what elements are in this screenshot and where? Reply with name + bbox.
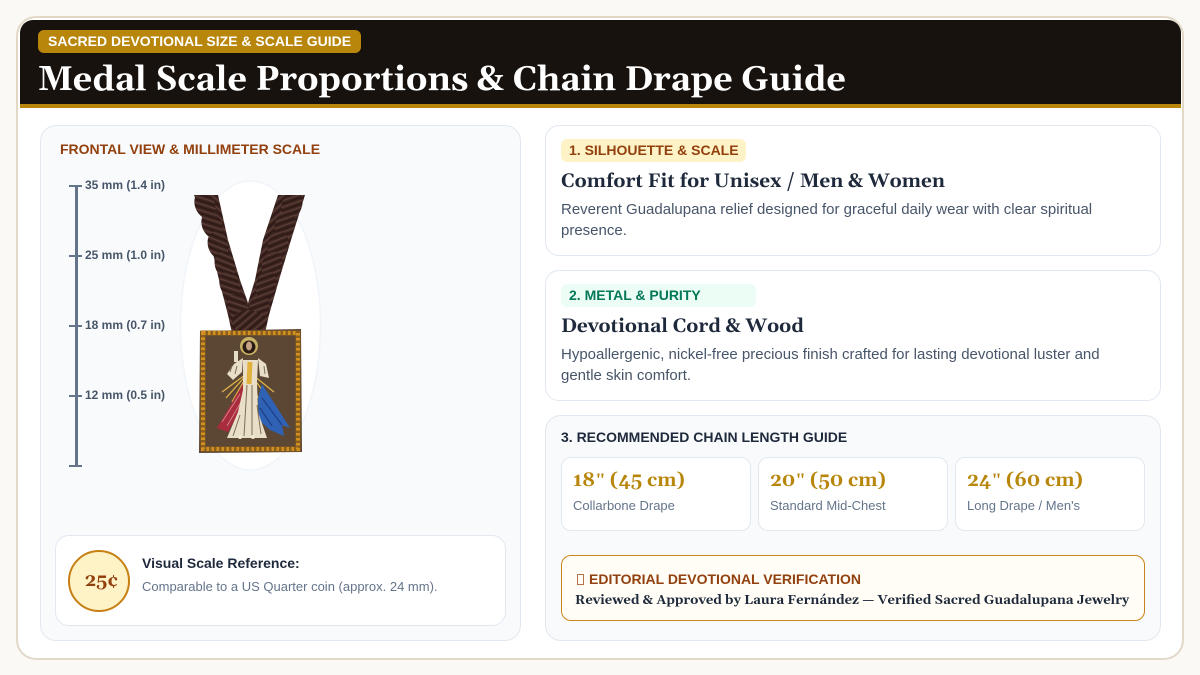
- callout text: Reviewed & Approved by Laura Fernández — Verified Sacred Guadalupana Jewelry: [575, 593, 1129, 609]
- white silhouette ellipse: [180, 181, 320, 470]
- tag: 1. SILHOUETTE & SCALE: [569, 142, 739, 158]
- millimeter ruler: 25 mm (1.0 in): [85, 248, 165, 262]
- medal illustration: [194, 195, 305, 453]
- chain option 24 inch: 24" (60 cm): [967, 468, 1083, 492]
- editorial verification callout: [561, 555, 1145, 621]
- rays: red: [217, 382, 244, 432]
- card heading: Comfort Fit for Unisex / Men & Women: [561, 170, 945, 194]
- millimeter ruler: 12 mm (0.5 in): [85, 388, 165, 402]
- header badge: SACRED DEVOTIONAL SIZE & SCALE GUIDE: [48, 33, 351, 49]
- chain option 18 inch: [561, 457, 751, 531]
- feet: [238, 435, 242, 439]
- tag: 2. METAL & PURITY: [569, 287, 701, 303]
- quarter coin: 25¢: [85, 570, 118, 593]
- card text: Reverent Guadalupana relief designed for graceful daily wear with clear spiritual: [561, 200, 1092, 218]
- robe: [227, 360, 267, 438]
- chain option 18 inch: Collarbone Drape: [573, 498, 675, 512]
- header banner: [20, 20, 1181, 108]
- panel: silhouette and scale: [545, 125, 1161, 256]
- halo, hair and face: [240, 337, 258, 355]
- visual scale reference card: [55, 535, 506, 626]
- chain option 20 inch: 20" (50 cm): [770, 468, 886, 492]
- scale reference text: Comparable to a US Quarter coin (approx. 24 mm).: [142, 579, 438, 594]
- quarter coin: [68, 550, 130, 612]
- title: Medal Scale Proportions & Chain Drape Guide: [38, 58, 846, 102]
- millimeter ruler: 35 mm (1.4 in): [85, 178, 165, 192]
- card text: Hypoallergenic, nickel-free precious finish crafted for lasting devotional luster and: [561, 346, 1100, 362]
- panel: chain length guide: [545, 415, 1161, 641]
- braided cord: [194, 195, 305, 330]
- millimeter ruler: [69, 178, 165, 467]
- golden rays: [222, 372, 274, 402]
- card text: [561, 200, 1092, 238]
- chain option 20 inch: Standard Mid-Chest: [770, 498, 886, 512]
- card text: gentle skin comfort.: [561, 366, 691, 384]
- card heading: Devotional Cord & Wood: [561, 315, 804, 339]
- callout heading: EDITORIAL DEVOTIONAL VERIFICATION: [589, 571, 861, 587]
- millimeter ruler: 18 mm (0.7 in): [85, 318, 165, 332]
- section heading: 3. RECOMMENDED CHAIN LENGTH GUIDE: [561, 429, 847, 445]
- missing-glyph icon box: [577, 574, 584, 585]
- panel: metal and purity: [545, 270, 1161, 401]
- panel: frontal view and scale: [40, 125, 521, 641]
- scapular patch: [199, 329, 302, 453]
- chain option 20 inch: [758, 457, 948, 531]
- card text: presence.: [561, 222, 627, 238]
- scale reference heading: Visual Scale Reference:: [142, 555, 300, 571]
- panel heading: FRONTAL VIEW & MILLIMETER SCALE: [60, 141, 320, 157]
- rays: blue: [258, 384, 290, 436]
- chain option 24 inch: [955, 457, 1145, 531]
- tag: [561, 284, 756, 307]
- arms: [227, 358, 243, 380]
- chain option 18 inch: 18" (45 cm): [573, 468, 685, 492]
- card text: [561, 346, 1100, 384]
- header badge: [38, 30, 361, 53]
- chain option 24 inch: Long Drape / Men's: [967, 498, 1080, 512]
- tag: [561, 139, 746, 162]
